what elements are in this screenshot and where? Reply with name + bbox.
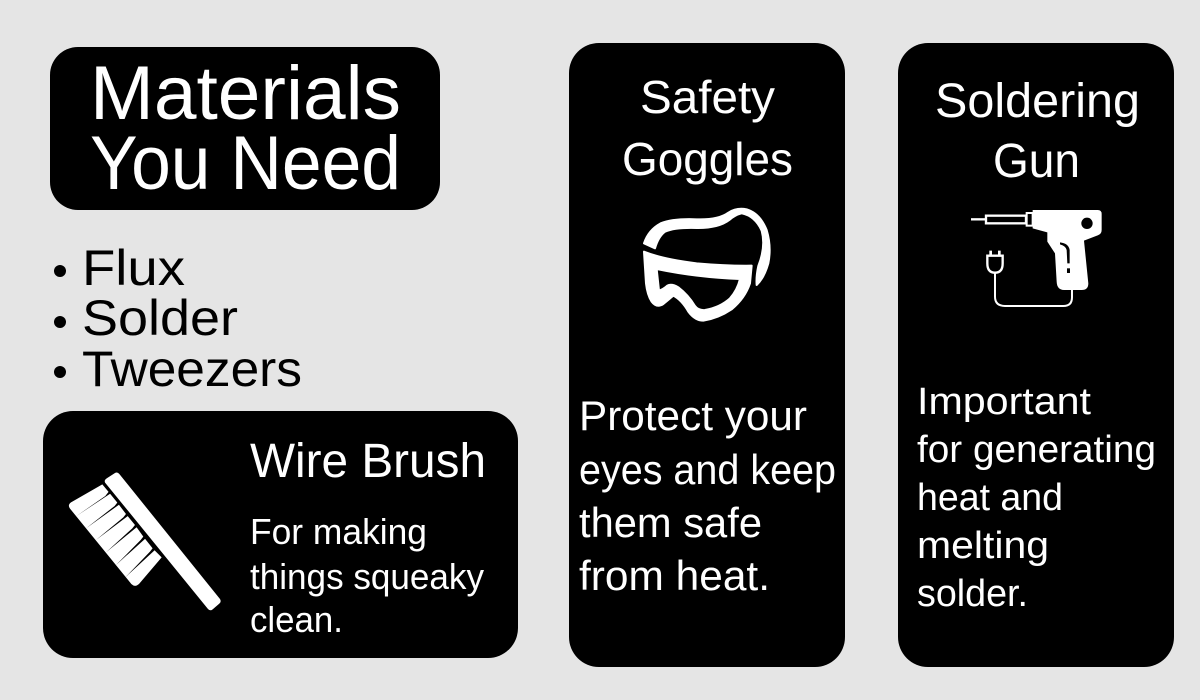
bullet list: materials: Flux (82, 240, 185, 296)
panel: safety goggles (569, 43, 845, 667)
heading: Materials You Need (90, 51, 401, 206)
text: goggles description (579, 392, 836, 599)
icon: wire brush (69, 473, 221, 610)
text: goggles description: them safe (579, 499, 762, 546)
text: wire brush description: things squeaky (250, 556, 484, 597)
text: wire brush description (250, 511, 484, 640)
panel: soldering gun (898, 43, 1174, 667)
icon: goggles (644, 209, 770, 321)
text: soldering gun description: solder. (917, 573, 1028, 615)
heading: Safety Goggles: Safety (640, 71, 775, 123)
icon: soldering gun (971, 210, 1102, 306)
heading: Soldering Gun: Gun (993, 135, 1080, 188)
text: wire brush description: clean. (250, 599, 343, 640)
panel: title (50, 47, 440, 210)
heading: Soldering Gun (935, 75, 1140, 188)
text: soldering gun description (917, 381, 1156, 615)
text: soldering gun description: Important (917, 381, 1091, 423)
heading: Materials You Need: You Need (90, 121, 401, 206)
heading: Materials You Need: Materials (90, 51, 401, 136)
text: soldering gun description: melting (917, 525, 1049, 567)
text: soldering gun description: heat and (917, 477, 1063, 519)
text: goggles description: eyes and keep (579, 446, 836, 493)
text: soldering gun description: for generating (917, 429, 1156, 471)
text: goggles description: Protect your (579, 392, 807, 439)
text: wire brush description: For making (250, 511, 427, 552)
bullet list: materials (54, 240, 302, 397)
heading: Safety Goggles (622, 71, 793, 185)
heading: Safety Goggles: Goggles (622, 133, 793, 185)
heading: Soldering Gun: Soldering (935, 75, 1140, 128)
heading: Wire Brush: Wire Brush (250, 435, 486, 488)
bullet list: materials: Tweezers (82, 341, 302, 397)
bullet list: materials: Solder (82, 290, 238, 346)
text: goggles description: from heat. (579, 552, 770, 599)
panel: wire brush (43, 411, 518, 658)
